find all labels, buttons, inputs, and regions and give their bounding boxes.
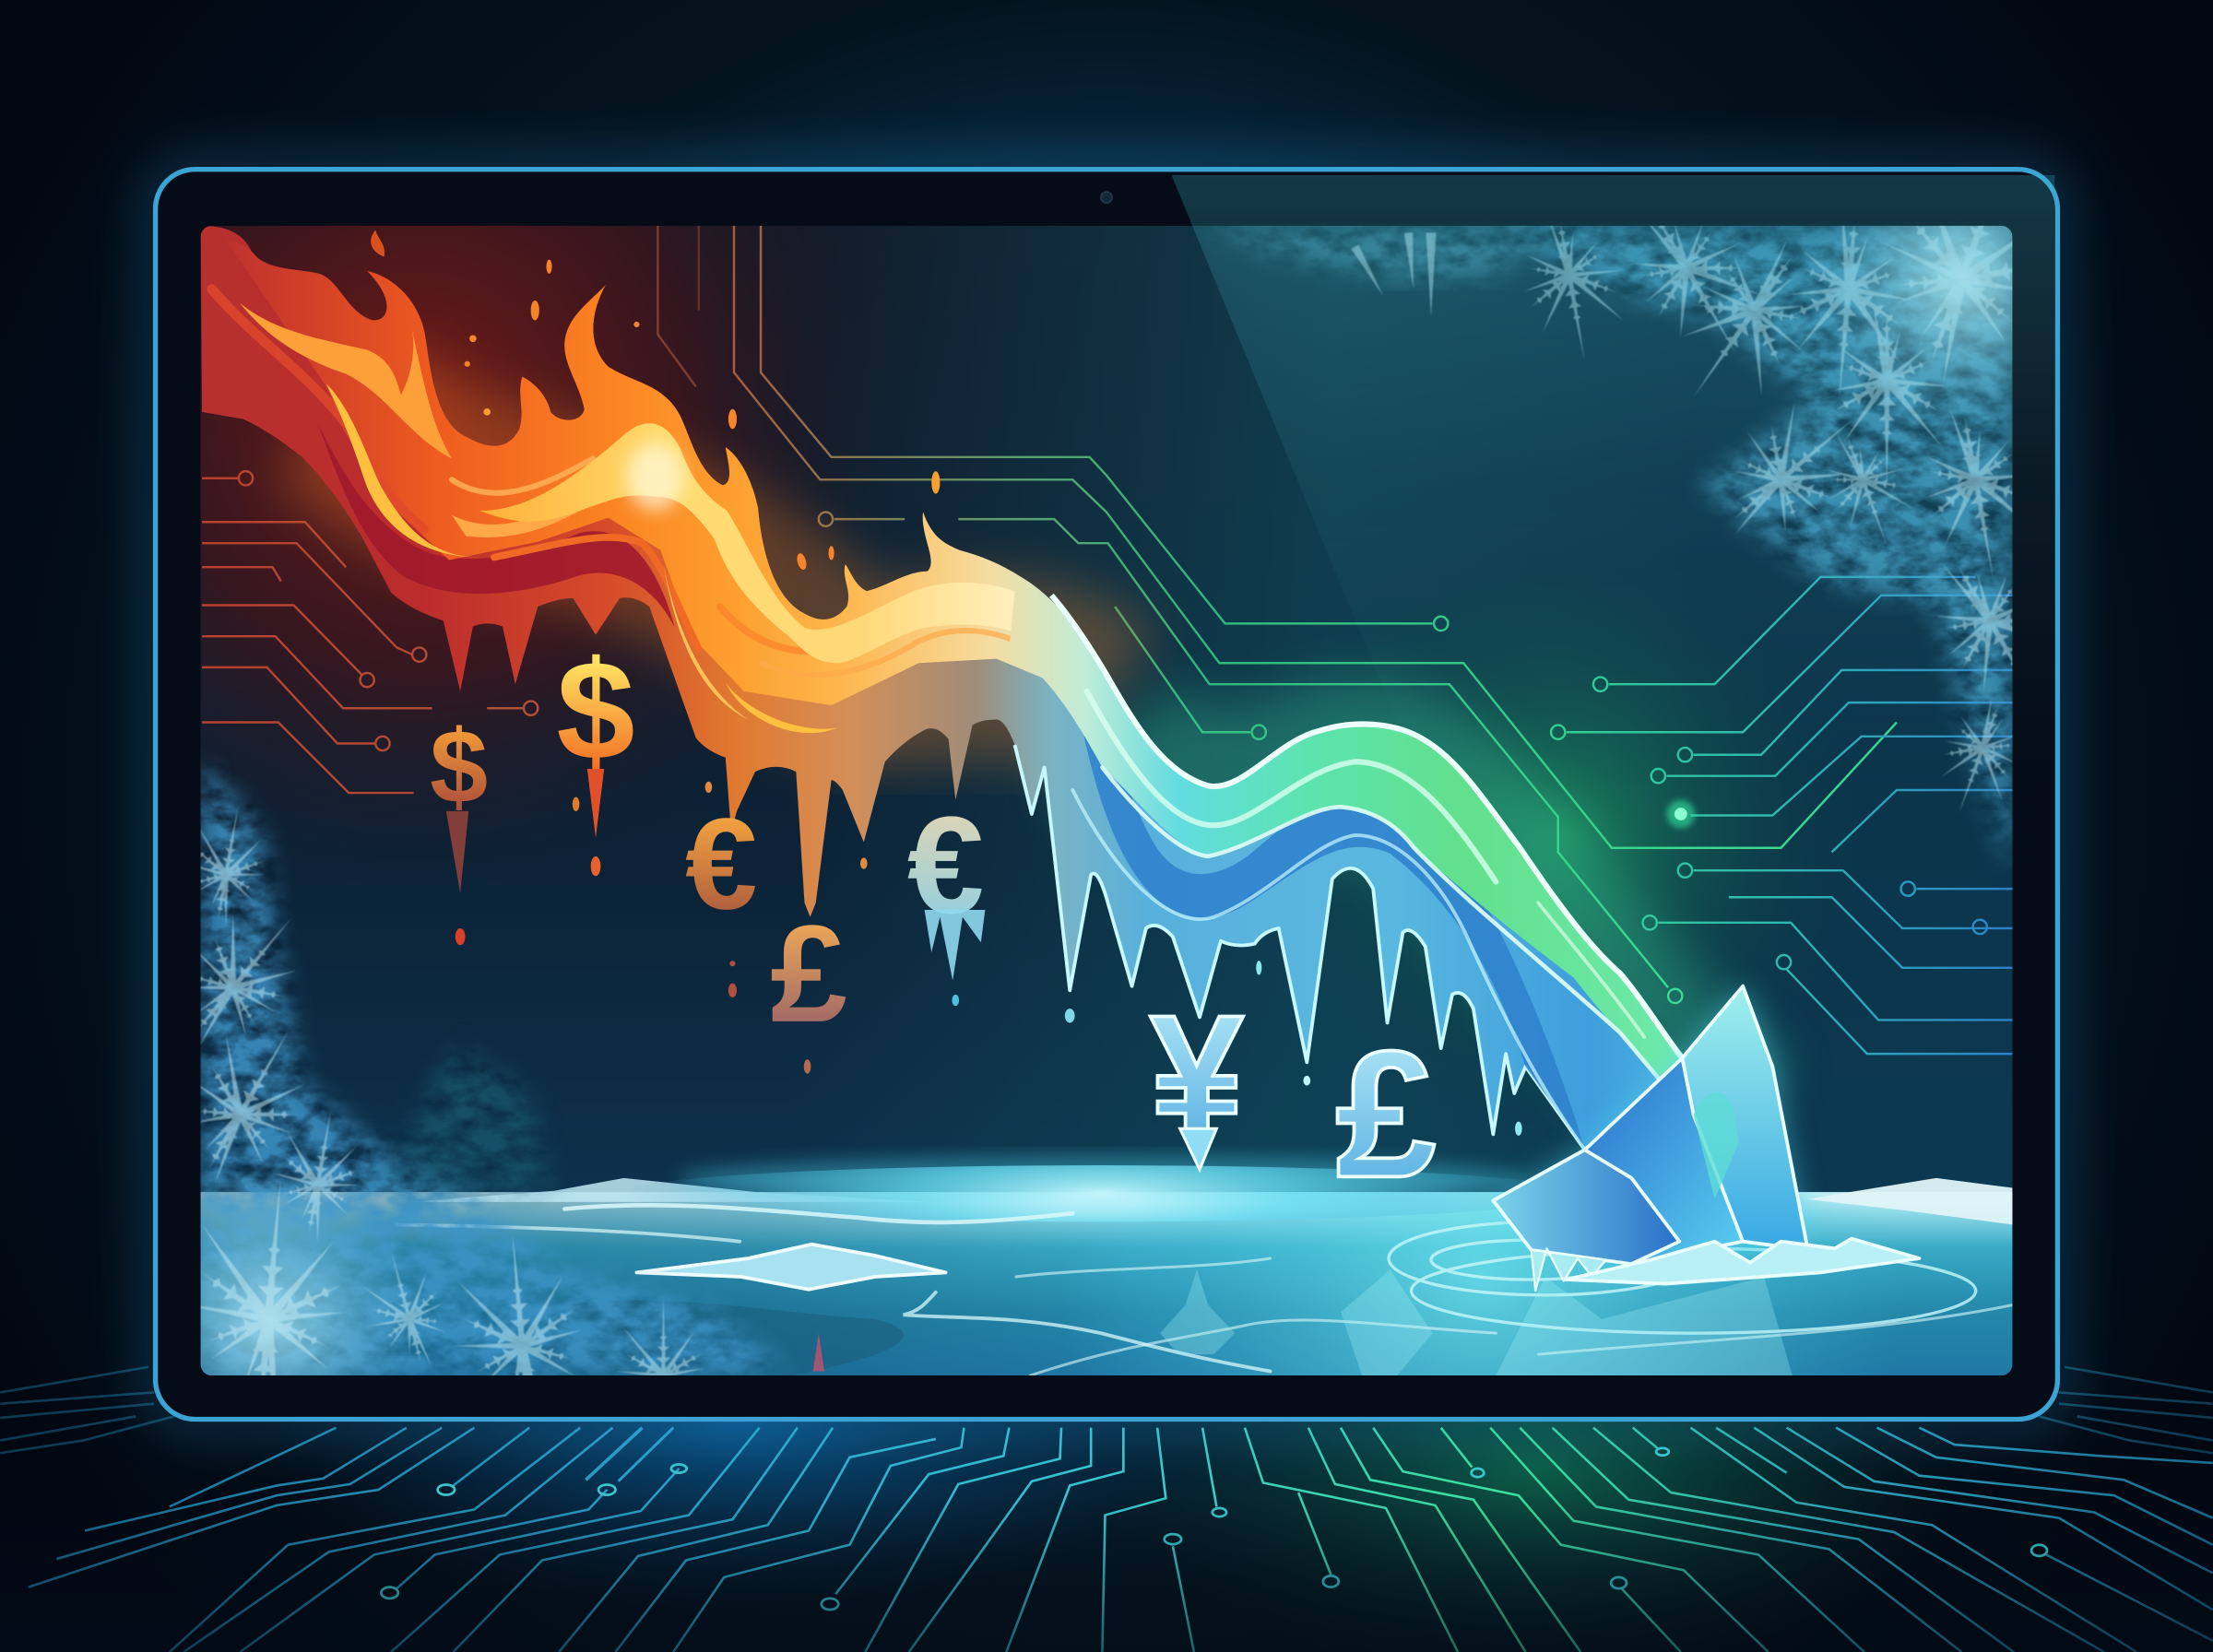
ribbon body with drips	[201, 226, 1708, 1171]
ice top edge	[1051, 596, 1682, 1058]
green ice band	[1009, 575, 1682, 1098]
monitor	[146, 117, 2092, 1435]
frozen lake	[201, 1155, 2012, 1377]
distant ice right	[1806, 1178, 2012, 1224]
symbol: pound brown: £	[770, 896, 847, 1051]
ice reflections	[1160, 1269, 1793, 1375]
ribbon glow cool	[1115, 734, 1736, 1128]
frost faint tree	[381, 1044, 550, 1192]
falling droplets	[456, 782, 1522, 1136]
frost: top right	[1215, 225, 2012, 865]
flame yellow highlight	[480, 423, 1115, 719]
circuit floor	[0, 1367, 2213, 1652]
currency symbols	[430, 631, 1436, 1215]
darker lake patch	[537, 1300, 904, 1375]
red-to-green circuit traces	[202, 226, 1897, 1003]
ice floe	[636, 1245, 946, 1290]
floor glow green	[1115, 1418, 1961, 1652]
crimson under-band	[318, 423, 675, 628]
symbol: yen ice: ¥	[1150, 980, 1244, 1169]
flame sparks	[371, 230, 940, 571]
ribbon glow warm	[339, 409, 1101, 705]
flame stripes	[212, 289, 1072, 678]
flame main orange	[226, 240, 1108, 743]
small red reflection	[813, 1333, 824, 1371]
floor fade	[0, 1495, 2213, 1652]
frost spikes bottom left	[146, 797, 706, 1435]
flame white-hot core	[627, 443, 683, 511]
ripples	[1389, 1221, 1976, 1333]
lake ice lines	[396, 1205, 2012, 1375]
ribbon	[201, 226, 1919, 1291]
blue ice band	[1072, 678, 1585, 1150]
frost: bottom left	[146, 761, 790, 1435]
frost haze top centre	[1200, 226, 1553, 282]
symbol: dollar small	[430, 708, 488, 893]
symbol: euro pale: €	[907, 787, 984, 942]
frost spikes top right	[1351, 225, 2012, 811]
camera	[1101, 192, 1112, 203]
floor glow blue	[254, 1418, 1242, 1652]
ice inner stripes	[1072, 691, 1665, 1150]
screen background	[201, 226, 2012, 1375]
frost haze bottom left	[201, 761, 790, 1375]
glowing node	[1667, 800, 1695, 828]
horizon glow	[621, 1165, 1580, 1221]
horizon glow above	[678, 1155, 1524, 1200]
flame yellow accents	[240, 303, 837, 733]
frost haze top right	[1496, 226, 2012, 875]
shard glow	[1493, 986, 1808, 1264]
icicle outline	[1015, 745, 1585, 1150]
glass reflection	[1171, 175, 2054, 790]
circuit floor nodes	[381, 1448, 2047, 1610]
distant ice left	[409, 1178, 931, 1202]
symbol: pound ice: £	[1336, 1013, 1436, 1215]
monitor frame	[156, 170, 2057, 1419]
right circuit traces	[1551, 577, 2012, 1054]
symbol: dollar small: $	[430, 708, 488, 825]
monitor glow	[156, 170, 2057, 1419]
symbol: euro orange: €	[685, 792, 757, 937]
ice shard	[1493, 986, 1919, 1291]
symbol: dollar large: $	[556, 631, 635, 789]
screen	[201, 175, 2054, 1375]
